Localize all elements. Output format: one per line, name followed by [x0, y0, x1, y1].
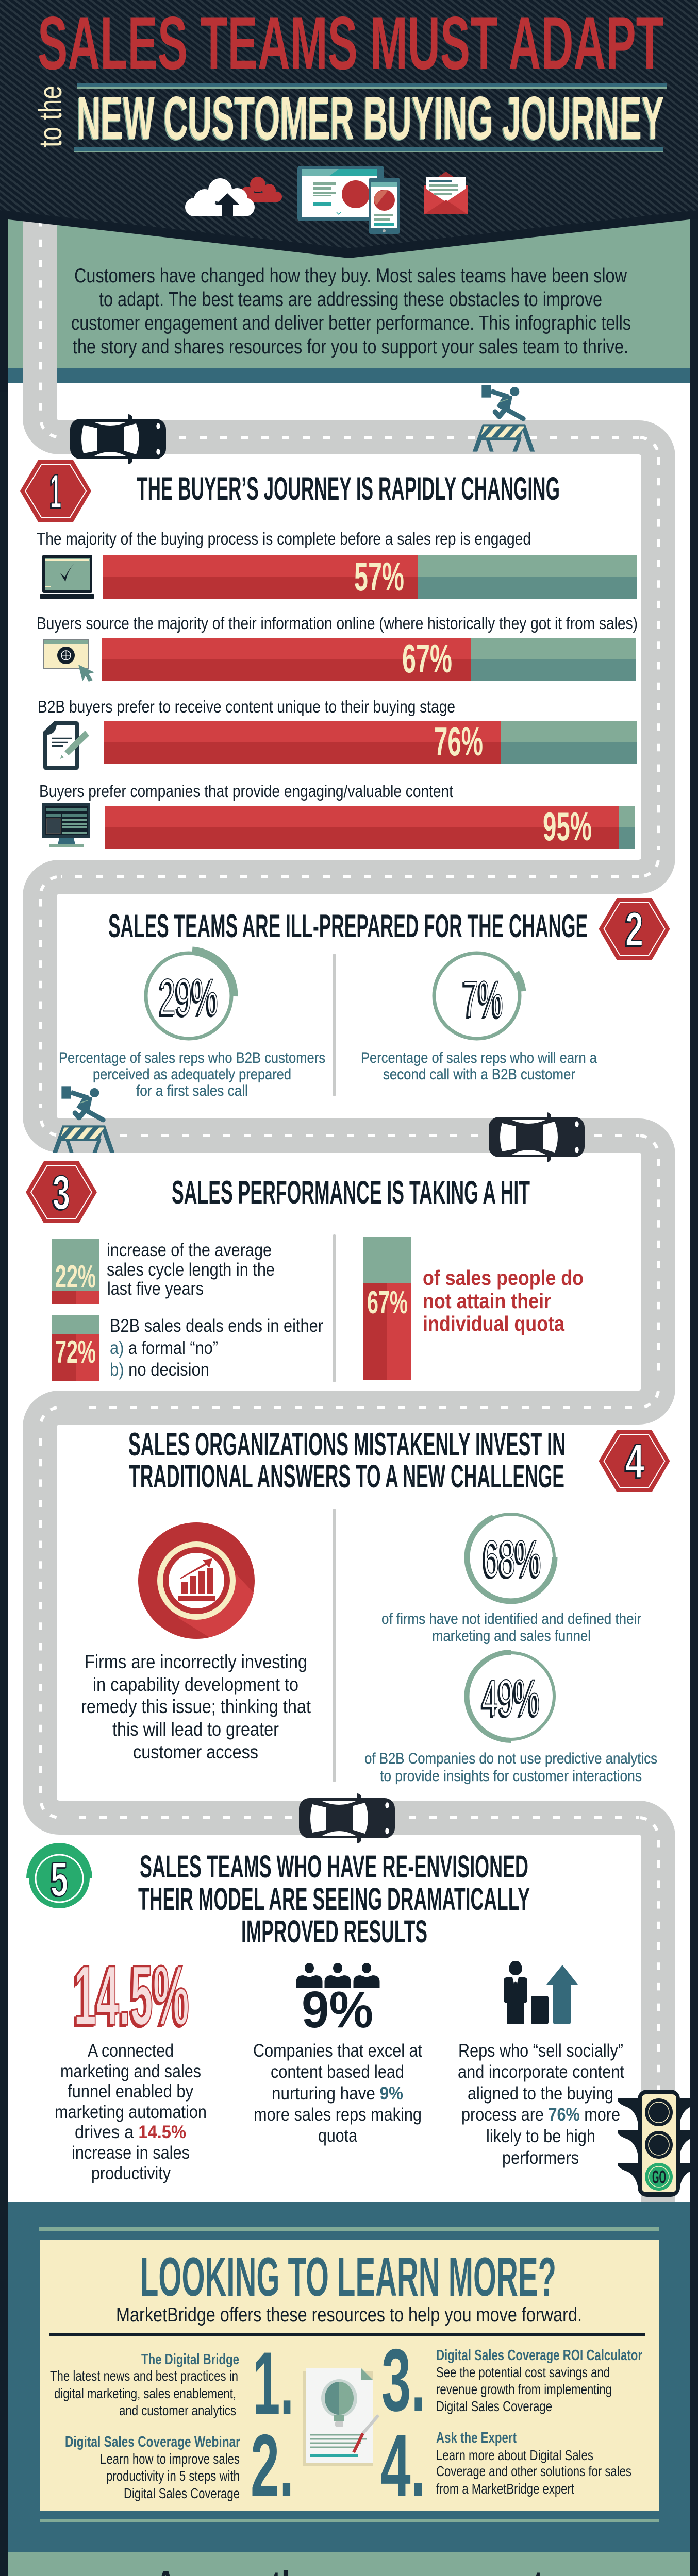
- panel: access resources: [8, 2552, 690, 2576]
- text: column 3: [458, 2041, 624, 2168]
- ring stat 29%: [146, 950, 235, 1039]
- text: column 2: quota: [318, 2126, 357, 2146]
- icon: envelope: [424, 172, 468, 214]
- text: column 1: increase in sales: [72, 2143, 190, 2163]
- text: 72% description: a) a formal “no”: [110, 1338, 218, 1358]
- text: 72% description: [110, 1316, 323, 1380]
- badge 2: [599, 898, 670, 960]
- intro text: to adapt. The best teams are addressing these obstacles to improve: [99, 289, 602, 311]
- badge 4: [599, 1430, 670, 1492]
- badge 3: 3: [53, 1165, 70, 1219]
- big stat 9%: 9%: [302, 1981, 373, 2039]
- resource 2: productivity in 5 steps with: [106, 2468, 240, 2484]
- text: column 2: nurturing have 9%: [272, 2083, 403, 2104]
- text: 22% description: sales cycle length in the: [107, 1260, 275, 1280]
- icon: white upload cloud: [185, 178, 255, 216]
- badge 5: [26, 1843, 92, 1908]
- text: 7% description: Percentage of sales reps who will earn a: [361, 1049, 597, 1066]
- text: 67% description: individual quota: [423, 1312, 565, 1335]
- resource 4: from a MarketBridge expert: [436, 2481, 574, 2497]
- ring stat 68%: [467, 1514, 555, 1601]
- resource 2: [65, 2434, 240, 2501]
- text: firms investing: remedy this issue; thinking that: [81, 1696, 311, 1717]
- icon: jumper and barricade 1: [473, 385, 535, 452]
- section 5: 14.5%: [74, 1948, 189, 2043]
- resource 2: Digital Sales Coverage: [124, 2485, 240, 2501]
- badge 5: 5: [51, 1852, 68, 1906]
- text: column 2: content based lead: [271, 2062, 404, 2082]
- text: column 2: [253, 2041, 422, 2146]
- header banner: [0, 0, 698, 392]
- text: 29% description: for a first sales call: [136, 1082, 248, 1099]
- icon: rep with rising arrow: [504, 1961, 578, 2024]
- badge 4: 4: [625, 1434, 644, 1488]
- badge 3: [26, 1161, 97, 1223]
- resource 3: revenue growth from implementing: [436, 2381, 612, 2397]
- band: teal strip under intro: [8, 368, 690, 383]
- resource 3: See the potential cost savings and: [436, 2364, 610, 2380]
- stat block 72%: [52, 1315, 99, 1381]
- text: 68% description: [381, 1611, 641, 1645]
- resource 4: Ask the Expert: [436, 2430, 517, 2446]
- number 2: 2.: [251, 2416, 294, 2515]
- heading 5: IMPROVED RESULTS: [241, 1914, 427, 1949]
- resource 1: digital marketing, sales enablement,: [54, 2385, 236, 2401]
- stat row 3 label: B2B buyers prefer to receive content unique to their buying stage: [38, 697, 455, 716]
- text: firms investing: in capability development to: [93, 1674, 298, 1695]
- title bottom rule: [74, 147, 663, 152]
- icon: traffic light: [618, 2090, 698, 2197]
- icon: car 2: [489, 1112, 585, 1162]
- resource 2: Learn how to improve sales: [100, 2451, 240, 2467]
- section 1: [20, 460, 638, 849]
- title top rule: [77, 83, 667, 89]
- stat block 67%: [363, 1237, 411, 1380]
- text: column 3: performers: [502, 2148, 579, 2168]
- text: column 3: aligned to the buying: [468, 2083, 613, 2104]
- text: column 3: process are 76% more: [461, 2105, 620, 2125]
- resource 3: Digital Sales Coverage: [436, 2398, 552, 2414]
- icon: browser window with cursor: [43, 639, 94, 682]
- icon: monitor: [42, 803, 90, 847]
- bar 67%: [102, 636, 636, 681]
- text: column 1: drives a 14.5%: [75, 2122, 186, 2142]
- text: firms investing: Firms are incorrectly investing: [85, 1651, 307, 1672]
- text: 67% description: not attain their: [423, 1289, 551, 1313]
- text: firms investing: this will lead to greater: [112, 1719, 279, 1740]
- icon: jumper and barricade 2: [53, 1086, 115, 1153]
- bar 57%: 57%: [354, 554, 404, 599]
- text: 67% description: of sales people do: [423, 1266, 584, 1290]
- ring stat 7%: [434, 953, 523, 1039]
- panel: white road section: [8, 383, 690, 2202]
- number 3: 3.: [381, 2331, 426, 2430]
- icon: traffic light: GO: [652, 2166, 666, 2188]
- text: 29% description: Percentage of sales reps who B2B customers: [59, 1049, 325, 1066]
- icon: car 3: [299, 1793, 395, 1843]
- icon: document with light bulb: [303, 2368, 378, 2466]
- resource 3: Digital Sales Coverage ROI Calculator: [436, 2347, 642, 2364]
- stat block 67%: 67%: [367, 1285, 408, 1320]
- text: column 1: funnel enabled by: [68, 2081, 193, 2102]
- panel: intro background: [8, 216, 690, 368]
- ring stat 49%: [467, 1652, 554, 1740]
- section 4: [81, 1427, 670, 1785]
- bar 57%: [103, 554, 637, 599]
- resource 1: The Digital Bridge: [141, 2351, 239, 2368]
- text: 72% description: b) no decision: [110, 1360, 209, 1380]
- stat row 4 label: Buyers prefer companies that provide engaging/valuable content: [39, 782, 453, 801]
- ring stat 68%: 68%: [483, 1530, 541, 1588]
- text: 67% description: [423, 1266, 584, 1335]
- bar 67%: 67%: [402, 636, 452, 681]
- text: 7% description: [361, 1049, 597, 1083]
- resource 4: Coverage and other solutions for sales: [436, 2463, 631, 2479]
- text: column 1: marketing automation: [55, 2102, 207, 2122]
- bar 76%: 76%: [434, 719, 483, 764]
- icon: laptop check: [40, 555, 94, 599]
- section 5: [26, 1843, 698, 2197]
- resource 3: [436, 2347, 642, 2414]
- number 1: 1.: [253, 2334, 294, 2433]
- icon: three people: [296, 1963, 379, 1988]
- resource 2: Digital Sales Coverage Webinar: [65, 2434, 240, 2450]
- text: 7% description: second call with a B2B customer: [383, 1066, 575, 1083]
- panel: looking to learn more: [8, 2202, 690, 2552]
- ring stat 49%: 49%: [482, 1669, 540, 1727]
- text: firms investing: customer access: [133, 1741, 258, 1762]
- badge 1: [20, 460, 91, 522]
- text: 49% description: of B2B Companies do not use predictive analytics: [364, 1750, 657, 1767]
- stat block 22%: 22%: [55, 1259, 96, 1295]
- resource 4: Learn more about Digital Sales: [436, 2447, 593, 2463]
- stat row 1 label: The majority of the buying process is complete before a sales rep is engaged: [37, 529, 531, 548]
- road: [40, 216, 659, 2202]
- text: 49% description: to provide insights for customer interactions: [380, 1768, 642, 1785]
- rotated text: to the: to the: [33, 86, 69, 147]
- text: 22% description: increase of the average: [107, 1240, 272, 1260]
- resource 1: The latest news and best practices in: [50, 2368, 238, 2384]
- text: 29% description: perceived as adequately prepared: [93, 1066, 291, 1083]
- resource 1: and customer analytics: [119, 2402, 236, 2418]
- bar 95%: [105, 804, 635, 849]
- section 2: [59, 898, 670, 1099]
- text: column 2: more sales reps making: [254, 2105, 422, 2125]
- icon: growth chart badge: [138, 1522, 255, 1639]
- heading 4: [128, 1427, 566, 1495]
- intro text: [71, 265, 631, 358]
- resource 1: [50, 2351, 239, 2418]
- text: firms investing: [81, 1651, 311, 1762]
- text: 49% description: [364, 1750, 657, 1785]
- ring stat 7%: 7%: [463, 971, 503, 1028]
- text: column 2: Companies that excel at: [253, 2041, 422, 2061]
- text: column 3: and incorporate content: [458, 2062, 624, 2082]
- text: column 1: marketing and sales: [60, 2061, 201, 2081]
- text: column 1: A connected: [88, 2041, 174, 2061]
- text: 72% description: B2B sales deals ends in either: [110, 1316, 323, 1336]
- resource 4: [436, 2430, 631, 2497]
- icon: red cloud: [241, 177, 282, 202]
- text: column 3: Reps who “sell socially”: [458, 2041, 623, 2061]
- ring stat 29%: 29%: [159, 969, 218, 1026]
- number 4: 4.: [380, 2416, 426, 2515]
- section 3: [26, 1161, 584, 1382]
- text: 68% description: marketing and sales funnel: [432, 1628, 591, 1645]
- badge 2: 2: [625, 902, 643, 956]
- icon: tablet: [297, 166, 384, 221]
- text: column 1: [55, 2041, 207, 2183]
- stat block 22%: [52, 1239, 99, 1304]
- bar 76%: [104, 719, 637, 764]
- text: 68% description: of firms have not identified and defined their: [381, 1611, 641, 1628]
- text: 29% description: [59, 1049, 325, 1099]
- icon: car 1: [70, 414, 166, 464]
- heading 5: [138, 1849, 530, 1949]
- stat block 72%: 72%: [55, 1334, 96, 1370]
- bar 95%: 95%: [543, 804, 592, 849]
- text: column 3: likely to be high: [486, 2126, 595, 2146]
- icon: phone: [369, 178, 400, 234]
- text: 22% description: [107, 1240, 275, 1299]
- text: 22% description: last five years: [107, 1279, 204, 1299]
- text: column 1: productivity: [91, 2163, 171, 2183]
- subheading: MarketBridge offers these resources to help you move forward.: [116, 2304, 582, 2326]
- badge 1: 1: [50, 464, 61, 518]
- icon: document and pencil: [43, 721, 89, 770]
